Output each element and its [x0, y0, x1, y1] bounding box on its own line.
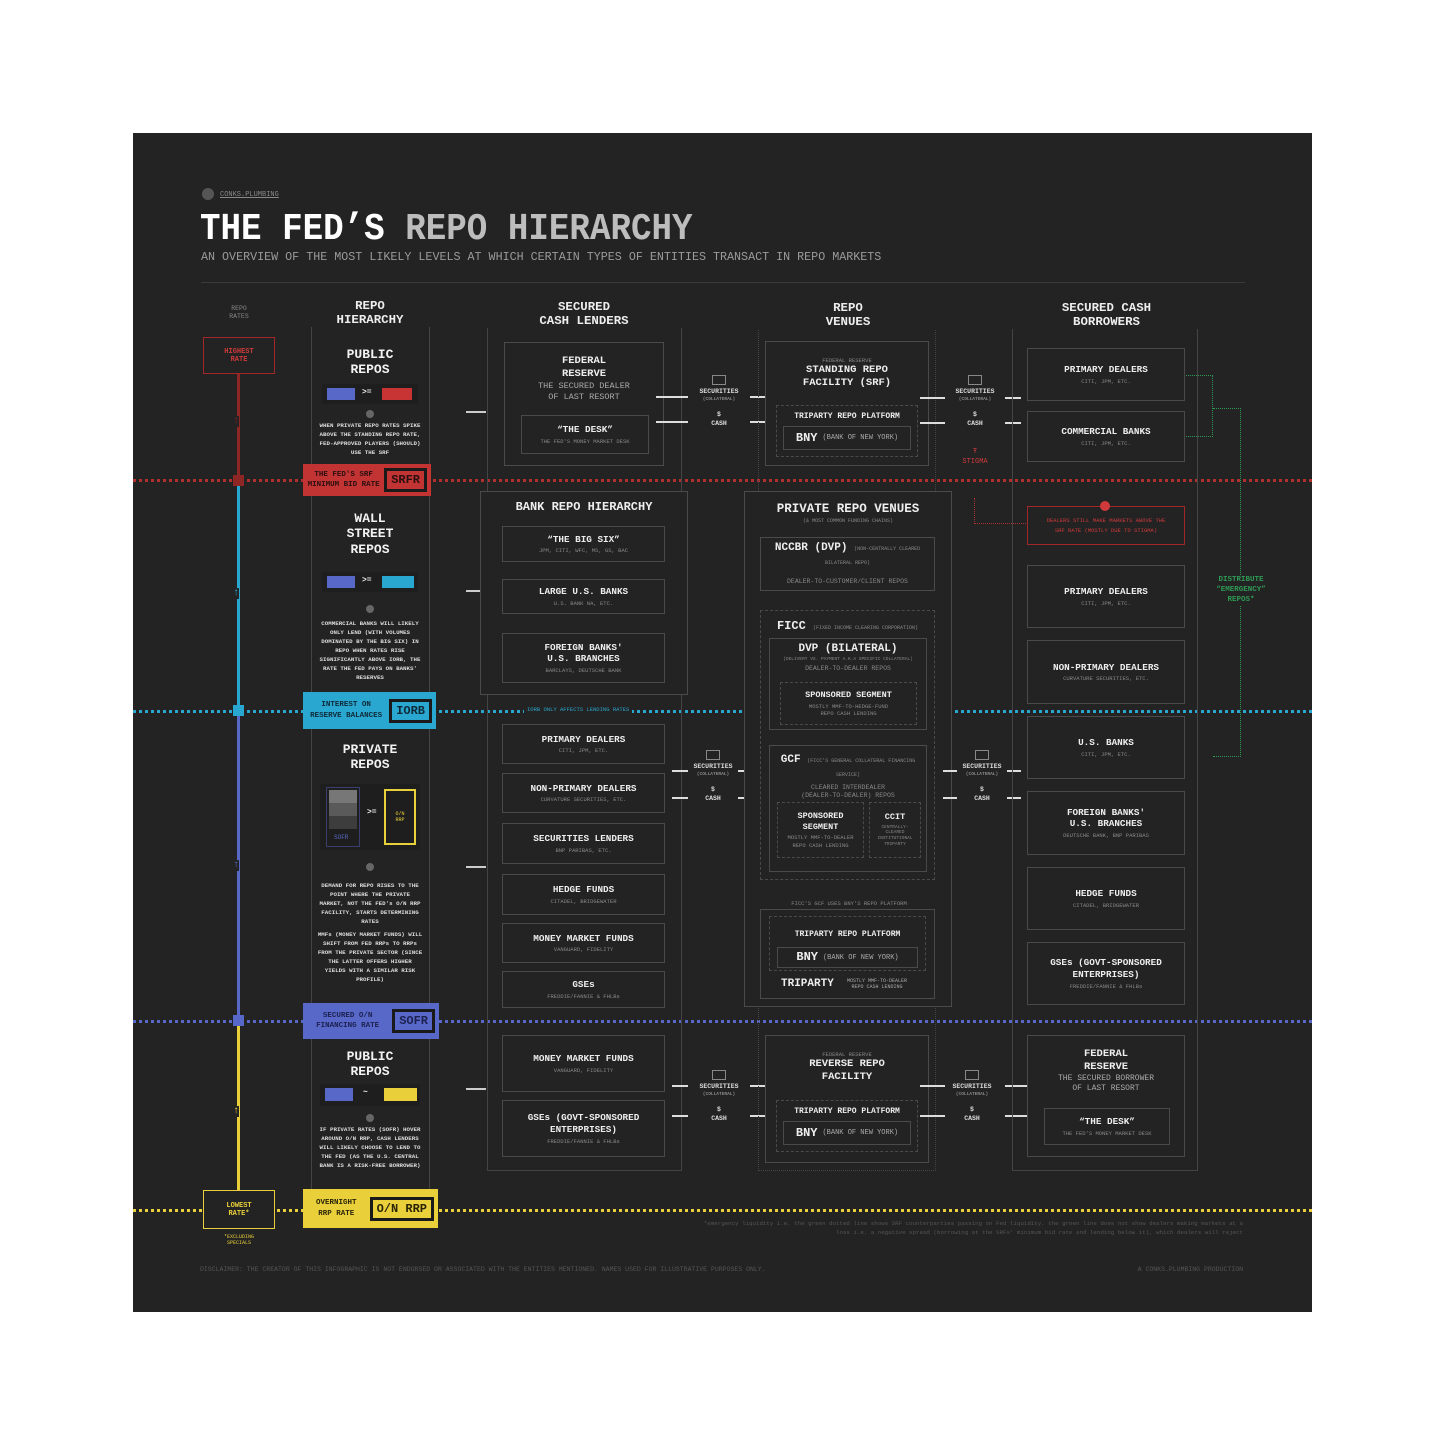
exchange arrows col3-col4 [920, 375, 1027, 1122]
bank repo hierarchy: LARGE U.S. BANKS [539, 586, 628, 597]
federal reserve box [504, 342, 664, 466]
exchange arrows col2-col3: SECURITIES [699, 1083, 738, 1090]
column 1: repo hierarchy [311, 299, 430, 1189]
column 2: secured cash lenders: MONEY MARKET FUNDS [533, 933, 634, 944]
green emergency repo line: REPOS* [1227, 596, 1254, 604]
column 3: repo venues: VENUES [826, 315, 870, 329]
private repo venues: REPO CASH LENDING [852, 984, 903, 990]
federal reserve box: THE FED'S MONEY MARKET DESK [540, 438, 630, 445]
column 1: repo hierarchy: REPOS [350, 542, 390, 557]
private repo venues: FICC (FIXED INCOME CLEARING CORPORATION) [777, 619, 918, 633]
private repo venues: (DEALER-TO-DEALER) REPOS [801, 792, 895, 799]
private repo venues: REPO CASH LENDING [792, 842, 849, 849]
logo: CONKS.PLUMBING [220, 191, 279, 199]
exchange arrows col2-col3: CASH [711, 1115, 727, 1122]
highest rate box: HIGHEST [224, 348, 254, 356]
column 2: secured cash lenders: CITI, JPM, ETC. [559, 747, 608, 754]
column 3: repo venues [744, 301, 952, 1171]
exchange arrows col2-col3: $ [711, 786, 715, 793]
axis: repo rates: ↑ [233, 588, 239, 599]
column 4: secured cash borrowers: SECURED CASH [1062, 301, 1151, 315]
column 4: secured cash borrowers: BORROWERS [1073, 315, 1140, 329]
column 1: repo hierarchy: WALL [354, 511, 386, 526]
column 3: repo venues: REPO [833, 301, 863, 315]
column 1: repo hierarchy: COMMERCIAL BANKS WILL LIKELY ONLY LEND (WITH VOLUMES DOMINATED BY THE BIG SIX) IN REPO WHEN RATES RISE SIGNIFICANTLY ABOVE IORB, THE RATE THE FED PAYS ON BANKS' RESERVES [320, 620, 420, 681]
axis: repo rates: REPO [231, 305, 247, 312]
private repo venues: (BANK OF NEW YORK) [823, 954, 899, 962]
private repo venues: NCCBR (DVP) (NON-CENTRALLY CLEARED BILATERAL REPO) [775, 542, 920, 566]
private repo venues: TRIPARTY REPO PLATFORM [795, 930, 900, 939]
column 4: secured cash borrowers: THE FED'S MONEY MARKET DESK [1062, 1130, 1152, 1137]
private repo venues: SPONSORED SEGMENT [805, 690, 892, 700]
bank repo hierarchy: U.S. BANK NA, ETC. [554, 600, 613, 607]
exchange arrows col2-col3: $ [717, 1106, 721, 1113]
lowest rate box: RATE* [228, 1210, 250, 1218]
federal reserve box: OF LAST RESORT [548, 392, 620, 402]
SRF box: BNY [796, 430, 817, 444]
column 4: secured cash borrowers: THE SECURED BORROWER [1058, 1074, 1154, 1083]
private repo venues: MOSTLY MMF-TO-DEALER [847, 978, 907, 984]
column 4: secured cash borrowers: OF LAST RESORT [1072, 1084, 1140, 1093]
column 1: repo hierarchy: REPO [355, 299, 385, 313]
exchange arrows col3-col4: (COLLATERAL) [959, 397, 991, 402]
column 2: secured cash lenders: IORB ONLY AFFECTS LENDING RATES [527, 706, 629, 713]
bank repo hierarchy [480, 491, 688, 695]
SRF box: FACILITY (SRF) [803, 377, 891, 389]
column 4: secured cash borrowers: FEDERAL [1084, 1048, 1128, 1060]
exchange arrows col3-col4: $ [970, 1106, 974, 1113]
column 2: secured cash lenders: FREDDIE/FANNIE & FHLBs [547, 993, 620, 1000]
column 1: repo hierarchy: >= [367, 808, 377, 817]
badge: SOFR: SOFR [399, 1014, 428, 1028]
badge: IORB: IORB [396, 704, 425, 718]
private repo venues: SEGMENT [803, 822, 838, 832]
private repo venues: (DELIVERY VS. PAYMENT A.K.A SPECIFIC COLLATERAL) [783, 657, 913, 662]
column 2: secured cash lenders: SECURITIES LENDERS [533, 833, 634, 844]
column 1: repo hierarchy: ~ [363, 1088, 368, 1097]
private repo venues: BNY [796, 950, 818, 964]
exchange arrows col2-col3: (COLLATERAL) [697, 772, 729, 777]
SRF box: TRIPARTY REPO PLATFORM [794, 412, 900, 421]
column 1: repo hierarchy: PUBLIC [347, 1049, 393, 1064]
private repo venues: REPO CASH LENDING [820, 710, 877, 717]
federal reserve box: RESERVE [562, 368, 606, 380]
column 2: secured cash lenders: GSEs (GOVT-SPONSORED [528, 1112, 639, 1123]
badge: IORB: INTEREST ON [321, 701, 371, 709]
federal reserve box: “THE DESK” [557, 424, 613, 435]
private repo venues: FICC'S GCF USES BNY'S REPO PLATFORM [791, 900, 907, 907]
column 2: secured cash lenders: VANGUARD, FIDELITY [554, 946, 613, 953]
federal reserve box: THE SECURED DEALER [538, 381, 630, 391]
exchange arrows col2-col3: SECURITIES [693, 763, 732, 770]
axis: repo rates: ↑ [233, 860, 239, 871]
column 1: repo hierarchy: HIERARCHY [337, 313, 403, 327]
column 2: secured cash lenders: BNP PARIBAS, ETC. [555, 847, 612, 854]
badge: SOFR: SECURED O/N [323, 1012, 372, 1020]
column 1: repo hierarchy: DEMAND FOR REPO RISES TO THE POINT WHERE THE PRIVATE MARKET, NOT THE FED's O/N RRP FACILITY, STARTS DETERMINING RATES [320, 882, 420, 925]
highest rate box [203, 337, 275, 374]
column 4: secured cash borrowers: CITADEL, BRIDGEWATER [1073, 902, 1139, 909]
poster background [133, 133, 1312, 1312]
bank repo hierarchy: “THE BIG SIX” [547, 534, 620, 545]
lowest rate box: LOWEST [226, 1202, 252, 1210]
badge: O/N RRP: O/N RRP [377, 1202, 427, 1216]
badge: O/N RRP [303, 1189, 438, 1228]
private repo venues: CLEARED INTERDEALER [811, 784, 885, 790]
private repo venues: DEALER-TO-DEALER REPOS [805, 665, 891, 672]
private repo venues: SPONSORED [798, 811, 843, 821]
badge: SOFR [303, 1003, 439, 1039]
credit: A CONKS.PLUMBING PRODUCTION [1138, 1266, 1243, 1273]
badge: IORB [303, 692, 436, 729]
private repo venues: TRIPARTY [781, 978, 834, 990]
column 1: repo hierarchy: REPOS [350, 362, 390, 377]
column 2: secured cash lenders: SECURED [558, 300, 610, 314]
SRF box: FEDERAL RESERVE [822, 357, 872, 364]
RRP facility: REVERSE REPO [809, 1058, 885, 1070]
column 4: secured cash borrowers: FREDDIE/FANNIE & FHLBs [1070, 983, 1142, 990]
private repo venues: INSTITUTIONAL [877, 836, 913, 841]
exchange arrows col3-col4: STIGMA [962, 458, 988, 466]
column 2: secured cash lenders: ENTERPRISES) [550, 1124, 617, 1135]
column 4: secured cash borrowers: CITI, JPM, ETC. [1081, 440, 1131, 447]
bank repo hierarchy: FOREIGN BANKS' [544, 642, 623, 653]
private repo venues: (& MOST COMMON FUNDING CHAINS) [803, 518, 893, 524]
private repo venues: PRIVATE REPO VENUES [777, 502, 919, 516]
exchange arrows col3-col4: (COLLATERAL) [956, 1092, 988, 1097]
bank repo hierarchy: JPM, CITI, WFC, MS, GS, BAC [539, 547, 628, 554]
SRF box: (BANK OF NEW YORK) [822, 434, 898, 442]
connectors col1 to col2 [466, 411, 486, 413]
text: SPECIALS [227, 1240, 251, 1246]
axis: repo rates: RATES [229, 313, 249, 320]
column 1: repo hierarchy: WHEN PRIVATE REPO RATES SPIKE ABOVE THE STANDING REPO RATE, FED-APPROVED PLAYERS (SHOULD) USE THE SRF [320, 422, 420, 456]
bank repo hierarchy: BARCLAYS, DEUTSCHE BANK [546, 667, 621, 674]
column 4: secured cash borrowers: PRIMARY DEALERS [1064, 364, 1148, 375]
badge: O/N RRP: RRP RATE [318, 1210, 354, 1218]
private repo venues: DVP (BILATERAL) [798, 643, 898, 655]
column 4: secured cash borrowers: CITI, JPM, ETC. [1081, 378, 1131, 385]
column 1: repo hierarchy: SOFR [334, 834, 348, 841]
footnote: *emergency liquidity i.e. the green dotted line shows SRF counterparties passing on Fed liquidity. the green line does not show dealers making markets at a loss i.e. a negative spread (borrowing at the SRFs' minimum bid rate and lending below it), which dealers will reject [704, 1220, 1243, 1236]
exchange arrows col3-col4: SECURITIES [955, 388, 994, 395]
private repo venues [744, 491, 952, 1007]
column 1: repo hierarchy: >= [362, 388, 372, 397]
axis: repo rates: ↑ [233, 416, 239, 427]
exchange arrows col2-col3: (COLLATERAL) [703, 397, 735, 402]
badge: SRFR [303, 464, 431, 496]
column 1: repo hierarchy: RRP [395, 817, 404, 823]
column 4: secured cash borrowers: CURVATURE SECURITIES, ETC. [1063, 675, 1149, 682]
exchange arrows col3-col4: SECURITIES [952, 1083, 992, 1090]
private repo venues: MOSTLY MMF-TO-HEDGE-FUND [809, 703, 888, 710]
column 1: repo hierarchy: >= [362, 576, 372, 585]
badge: O/N RRP: OVERNIGHT [316, 1199, 357, 1207]
RRP facility: TRIPARTY REPO PLATFORM [794, 1107, 900, 1116]
column 2: secured cash lenders: CASH LENDERS [539, 314, 629, 328]
exchange arrows col2-col3: CASH [705, 795, 721, 802]
highest rate box: RATE [231, 356, 247, 364]
column 4: secured cash borrowers [1012, 301, 1198, 1171]
private repo venues: CLEARED [886, 830, 904, 835]
column 4: secured cash borrowers: CITI, JPM, ETC. [1081, 600, 1131, 607]
exchange arrows col2-col3: CASH [711, 420, 727, 427]
column 1: repo hierarchy: IF PRIVATE RATES (SOFR) HOVER AROUND O/N RRP, CASH LENDERS WILL LIKELY CHOOSE TO LEND TO THE FED (AS THE U.S. CENTRAL BANK IS A RISK-FREE BORROWER) [320, 1126, 420, 1169]
private repo venues: CCIT [885, 812, 905, 822]
exchange arrows col2-col3: SECURITIES [699, 388, 738, 395]
column 1: repo hierarchy: O/N [395, 811, 404, 817]
green emergency repo line [1186, 375, 1266, 757]
column 2: secured cash lenders: CURVATURE SECURITIES, ETC. [541, 796, 626, 803]
federal reserve box: FEDERAL [562, 355, 606, 367]
RRP facility: FACILITY [822, 1071, 872, 1083]
column 1: repo hierarchy: MMFs (MONEY MARKET FUNDS) WILL SHIFT FROM FED RRPs TO RRPs FROM THE PRIVATE SECTOR (SINCE THE LATTER OFFERS HIGHER YIELDS WITH A SIMILAR RISK PROFILE) [318, 931, 422, 983]
disclaimer: DISCLAIMER: THE CREATOR OF THIS INFOGRAPHIC IS NOT ENDORSED OR ASSOCIATED WITH THE ENTITIES MENTIONED. NAMES USED FOR ILLUSTRATIVE PURPOSES ONLY. [200, 1266, 766, 1273]
SRF box [765, 341, 929, 466]
badge: SRFR: MINIMUM BID RATE [308, 481, 380, 489]
column 2: secured cash lenders: HEDGE FUNDS [553, 884, 614, 895]
RRP facility: BNY [796, 1126, 817, 1140]
column 1: repo hierarchy: REPOS [350, 1064, 390, 1079]
column 4: secured cash borrowers: GSEs (GOVT-SPONSORED [1050, 957, 1162, 968]
private repo venues: MOSTLY MMF-TO-DEALER [787, 834, 854, 841]
RRP facility: (BANK OF NEW YORK) [822, 1129, 898, 1137]
green emergency repo line: DISTRIBUTE [1218, 576, 1264, 584]
column 2: secured cash lenders: MONEY MARKET FUNDS [533, 1053, 634, 1064]
private repo venues: GCF (FICC'S GENERAL COLLATERAL FINANCING SERVICE) [781, 754, 915, 778]
column 4: secured cash borrowers: CITI, JPM, ETC. [1081, 751, 1131, 758]
column 2: secured cash lenders: FREDDIE/FANNIE & FHLBs [547, 1138, 620, 1145]
axis: repo rates: *EXCLUDING [224, 1234, 254, 1240]
SRF box: STANDING REPO [806, 364, 888, 376]
column 4: secured cash borrowers: FOREIGN BANKS' [1067, 807, 1145, 818]
exchange arrows col2-col3: $ [717, 411, 721, 418]
column 4: secured cash borrowers: HEDGE FUNDS [1075, 888, 1137, 899]
column 4: secured cash borrowers: PRIMARY DEALERS [1064, 586, 1148, 597]
column 4: secured cash borrowers: COMMERCIAL BANKS [1061, 426, 1151, 437]
badge: SRFR: SRFR [391, 473, 420, 487]
logo [202, 188, 279, 200]
exchange arrows col3-col4: CASH [974, 795, 990, 802]
exchange arrows col3-col4: CASH [964, 1115, 980, 1122]
column 2: secured cash lenders: PRIMARY DEALERS [542, 734, 625, 745]
column 2: secured cash lenders [480, 300, 688, 1171]
subtitle: AN OVERVIEW OF THE MOST LIKELY LEVELS AT WHICH CERTAIN TYPES OF ENTITIES TRANSACT IN REPO MARKETS [201, 250, 881, 264]
title: THE FED’S REPO HIERARCHY [200, 208, 693, 251]
column 2: secured cash lenders: VANGUARD, FIDELITY [554, 1067, 613, 1074]
column 4: secured cash borrowers: SRF RATE (MOSTLY DUE TO STIGMA) [1055, 526, 1157, 534]
exchange arrows col3-col4: SECURITIES [962, 763, 1002, 770]
exchange arrows col3-col4: (COLLATERAL) [966, 772, 998, 777]
green emergency repo line: “EMERGENCY” [1216, 586, 1266, 594]
rate lines [133, 479, 1312, 482]
RRP facility [765, 1035, 929, 1163]
exchange arrows col2-col3 [656, 375, 765, 1122]
column 4: secured cash borrowers: “THE DESK” [1079, 1116, 1135, 1127]
column 4: secured cash borrowers: U.S. BRANCHES [1070, 818, 1142, 829]
column 1: repo hierarchy: REPOS [350, 757, 390, 772]
lowest rate box [203, 1190, 275, 1229]
column 2: secured cash lenders: CITADEL, BRIDGEWATER [550, 898, 616, 905]
column 2: secured cash lenders: NON-PRIMARY DEALERS [530, 783, 636, 794]
badge: SRFR: THE FED'S SRF [314, 470, 373, 478]
exchange arrows col3-col4: CASH [967, 420, 983, 427]
private repo venues: TRIPARTY [884, 842, 906, 847]
column 2: secured cash lenders: GSEs [572, 979, 595, 990]
RRP facility: FEDERAL RESERVE [822, 1051, 872, 1058]
column 1: repo hierarchy: PRIVATE [343, 742, 397, 757]
column 4: secured cash borrowers: RESERVE [1084, 1061, 1128, 1073]
axis: repo rates [203, 305, 275, 1246]
column 4: secured cash borrowers: DEUTSCHE BANK, BNP PARIBAS [1063, 832, 1149, 839]
column 4: secured cash borrowers: ENTERPRISES) [1073, 969, 1139, 980]
exchange arrows col3-col4: $ [973, 411, 977, 418]
private repo venues: CENTRALLY- [881, 825, 908, 830]
column 4: secured cash borrowers: DEALERS STILL MAKE MARKETS ABOVE THE [1047, 517, 1165, 524]
bank repo hierarchy: U.S. BRANCHES [547, 653, 620, 664]
exchange arrows col3-col4: $ [980, 786, 984, 793]
exchange arrows col3-col4: Ŧ [973, 448, 977, 456]
private repo venues: DEALER-TO-CUSTOMER/CLIENT REPOS [787, 578, 908, 585]
exchange arrows col2-col3: (COLLATERAL) [703, 1092, 735, 1097]
column 4: secured cash borrowers: U.S. BANKS [1078, 737, 1134, 748]
bank repo hierarchy: BANK REPO HIERARCHY [516, 500, 652, 514]
column 1: repo hierarchy: PUBLIC [347, 347, 393, 362]
badge: IORB: RESERVE BALANCES [310, 712, 382, 720]
badge: SOFR: FINANCING RATE [316, 1022, 379, 1030]
axis: repo rates: ↑ [233, 1106, 239, 1117]
column 4: secured cash borrowers: NON-PRIMARY DEALERS [1053, 662, 1159, 673]
column 1: repo hierarchy: STREET [347, 526, 393, 541]
